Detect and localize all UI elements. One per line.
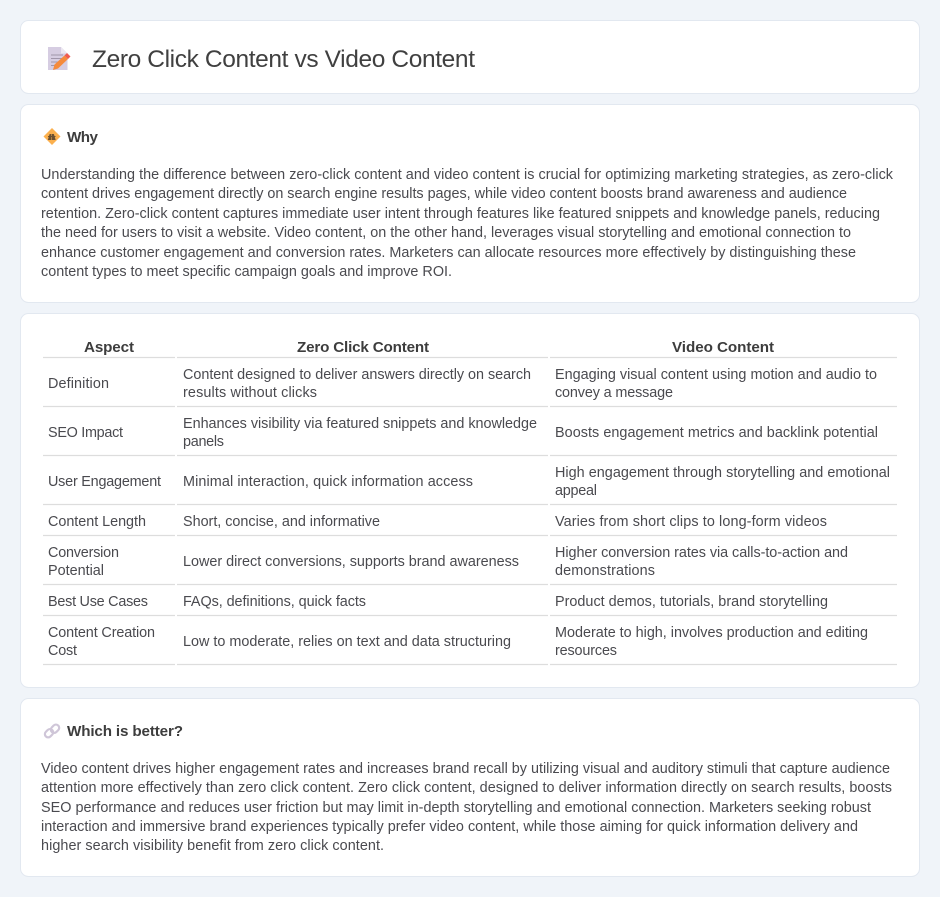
- panel: title header: [20, 20, 920, 94]
- table header: Aspect: [84, 339, 134, 356]
- row: best use cases: FAQs, definitions, quick facts: [183, 594, 366, 610]
- text block: why paragraph: Understanding the difference between zero-click content and video content is crucial for optimizing marketing strategies, as zero-click: [41, 167, 894, 183]
- row: content creation cost: resources: [555, 643, 617, 659]
- row: definition: Definition: [48, 376, 109, 392]
- text block: why paragraph: the need for users to visit a website. Video content, on the other hand, leverages visual storytelling and emotional connection to: [41, 225, 851, 241]
- row: best use cases: Best Use Cases: [48, 594, 148, 610]
- row: conversion potential: demonstrations: [555, 563, 655, 579]
- row: user engagement: High engagement through storytelling and emotional: [555, 465, 890, 481]
- row: definition: Engaging visual content using motion and audio to: [555, 367, 877, 383]
- row: seo impact: Boosts engagement metrics and backlink potential: [555, 425, 878, 441]
- text block: which paragraph: interaction and immersive brand experiences typically prefer video content, while those aiming for quick information delivery and: [41, 819, 858, 835]
- row: user engagement: appeal: [555, 483, 597, 499]
- table header: Video Content: [672, 339, 774, 356]
- row: definition: results without clicks: [183, 385, 317, 401]
- title: Zero Click Content vs Video Content: [92, 46, 475, 73]
- row: conversion potential: Conversion: [48, 545, 119, 561]
- row: content length: [48, 514, 827, 530]
- row: conversion potential: Potential: [48, 563, 104, 579]
- row: seo impact: Enhances visibility via featured snippets and knowledge: [183, 416, 537, 432]
- text block: which paragraph: attention more effectively than zero click content. Zero click content, designed to deliver information directly on search results, boosts: [41, 780, 892, 796]
- row: content length: Content Length: [48, 514, 146, 530]
- panel: which is better: [20, 698, 920, 876]
- text block: which paragraph: higher search visibility benefit from zero click content.: [41, 838, 384, 854]
- row: seo impact: panels: [183, 434, 224, 450]
- text block: which paragraph: Video content drives higher engagement rates and increases brand recall by utilizing visual and auditory stimuli that capture audience: [41, 761, 890, 777]
- row: definition: Content designed to deliver answers directly on search: [183, 367, 531, 383]
- row: best use cases: Product demos, tutorials, brand storytelling: [555, 594, 828, 610]
- icon: link: [44, 723, 61, 739]
- text block: which paragraph: SEO performance and reduces user friction but may limit in-depth storytelling and emotional connection. Marketers seeking robust: [41, 800, 871, 816]
- row: seo impact: SEO Impact: [48, 425, 123, 441]
- panel: why: [20, 104, 920, 302]
- row: best use cases: [48, 594, 828, 610]
- row: content creation cost: Content Creation: [48, 625, 155, 641]
- row: content length: Varies from short clips to long-form videos: [555, 514, 827, 530]
- row: user engagement: [48, 465, 890, 499]
- row: seo impact: [48, 416, 878, 450]
- row: conversion potential: Lower direct conversions, supports brand awareness: [183, 554, 519, 570]
- panel: comparison table: [20, 314, 920, 688]
- icon: warning diamond: [44, 128, 60, 145]
- text block: which paragraph: [41, 761, 892, 854]
- text block: why paragraph: [41, 167, 894, 280]
- row: definition: [48, 367, 877, 401]
- row: content creation cost: [48, 625, 868, 659]
- table header: [84, 339, 774, 356]
- row: user engagement: Minimal interaction, quick information access: [183, 474, 473, 490]
- text block: why paragraph: content types to meet specific campaign goals and improve ROI.: [41, 264, 452, 280]
- row: conversion potential: Higher conversion rates via calls-to-action and: [555, 545, 848, 561]
- table header: Zero Click Content: [297, 339, 429, 356]
- icon: memo with pencil: [48, 47, 70, 70]
- text block: why paragraph: enhance customer engagement and conversion rates. Marketers can allocate resources more effectively by distinguishing these: [41, 245, 856, 261]
- row: conversion potential: [48, 545, 848, 579]
- row: user engagement: User Engagement: [48, 474, 161, 490]
- row: content creation cost: Cost: [48, 643, 77, 659]
- text block: why paragraph: content drives engagement directly on search engine results pages, while video content boosts brand awareness and audience: [41, 186, 847, 202]
- row: content creation cost: Low to moderate, relies on text and data structuring: [183, 634, 511, 650]
- row: content length: Short, concise, and informative: [183, 514, 380, 530]
- text block: why paragraph: retention. Zero-click content captures immediate user intent through features like featured snippets and knowledge panels, reducing: [41, 206, 880, 222]
- heading: why: Why: [67, 129, 99, 146]
- row: content creation cost: Moderate to high, involves production and editing: [555, 625, 868, 641]
- row: definition: convey a message: [555, 385, 673, 401]
- heading: which is better: Which is better?: [67, 723, 183, 740]
